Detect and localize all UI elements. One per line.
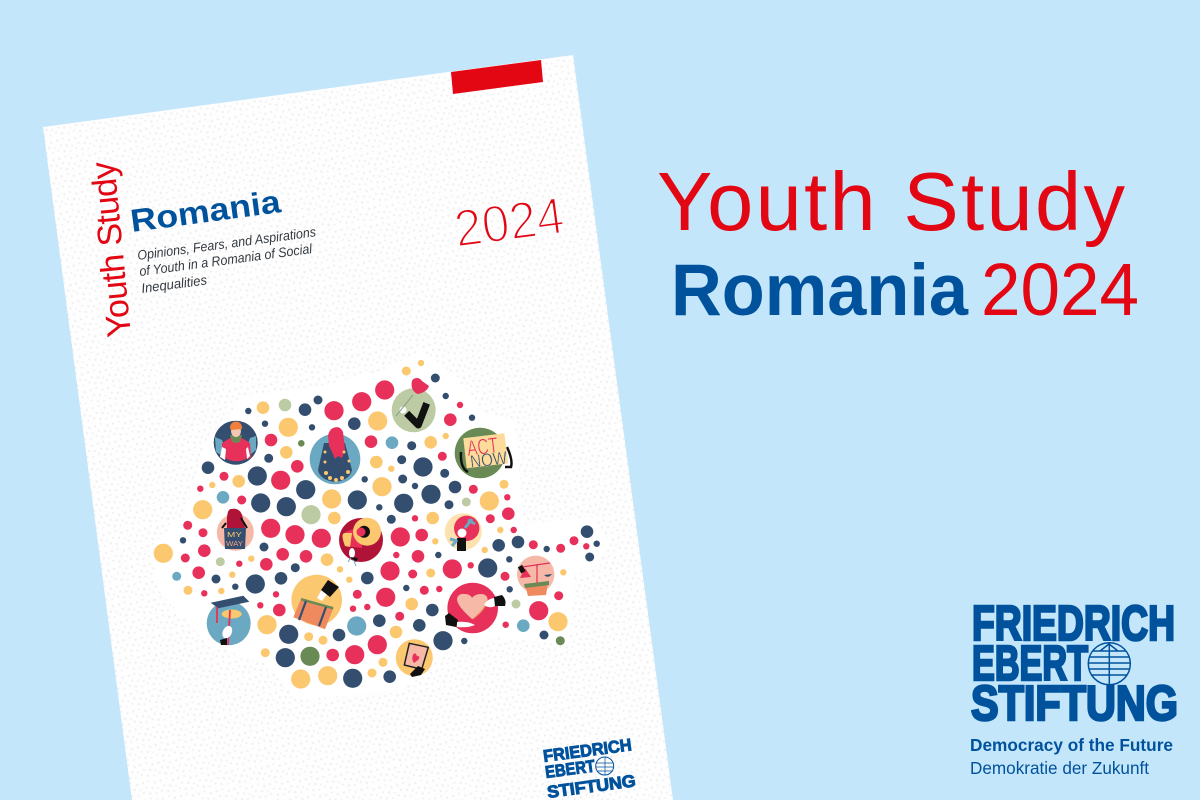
icon: young person — [214, 421, 258, 465]
icon: ACT NOW sign: NOW — [469, 448, 508, 472]
cover subtitle — [136, 224, 317, 296]
logo wordmark — [971, 597, 1178, 731]
icon: suitcase in hand — [291, 575, 342, 629]
dot map of Romania — [154, 360, 600, 689]
icon: ACT NOW sign: ACT — [466, 432, 499, 461]
icon: graduation cap — [207, 596, 251, 645]
logo slogan german: Demokratie der Zukunft — [970, 758, 1149, 778]
icon: MY WAY backpack — [217, 509, 254, 551]
cover title: Romania: Romania — [128, 183, 283, 239]
red dots — [181, 380, 590, 664]
cover subtitle: Opinions, Fears, and Aspirations — [136, 224, 317, 263]
cover subtitle: Inequalities — [140, 272, 208, 296]
cover logo — [542, 735, 637, 800]
green dots — [298, 440, 565, 666]
navy dots — [180, 374, 600, 688]
icon: wrench in hand — [445, 513, 482, 551]
icon: megaphone — [339, 518, 383, 566]
sage dots — [216, 399, 521, 608]
logo slogan english: Democracy of the Future — [970, 735, 1173, 755]
cover year: 2024 — [451, 187, 568, 259]
icon: European flag cloak — [310, 427, 360, 484]
icon: check and balloon hand — [392, 378, 436, 432]
headline — [657, 155, 1139, 331]
light blue dots — [172, 436, 530, 636]
headline: Youth Study: Youth Study — [657, 155, 1126, 248]
icon: ACT NOW sign — [455, 428, 512, 478]
red tab — [451, 60, 543, 94]
icon: MY WAY backpack: MY — [227, 530, 242, 539]
cover title: Youth Study: Youth Study — [84, 160, 139, 339]
icon: phone in hand — [396, 639, 433, 677]
logo globe — [1088, 643, 1130, 685]
logo wordmark: EBERT — [972, 637, 1088, 691]
cover logo: EBERT — [544, 756, 597, 782]
cover subtitle: of Youth in a Romania of Social — [138, 241, 314, 279]
headline: Romania: Romania — [671, 250, 969, 331]
headline: 2024: 2024 — [981, 248, 1139, 331]
white map backing — [155, 356, 605, 695]
report cover — [43, 55, 673, 800]
cover logo: FRIEDRICH — [542, 735, 633, 766]
yellow dots — [154, 360, 568, 689]
icon: scales on a pot — [517, 556, 554, 596]
cover sheet — [43, 55, 673, 800]
icon: heart in hands — [445, 583, 506, 633]
foundation logo — [970, 597, 1178, 778]
icon: MY WAY backpack: WAY — [226, 539, 243, 548]
